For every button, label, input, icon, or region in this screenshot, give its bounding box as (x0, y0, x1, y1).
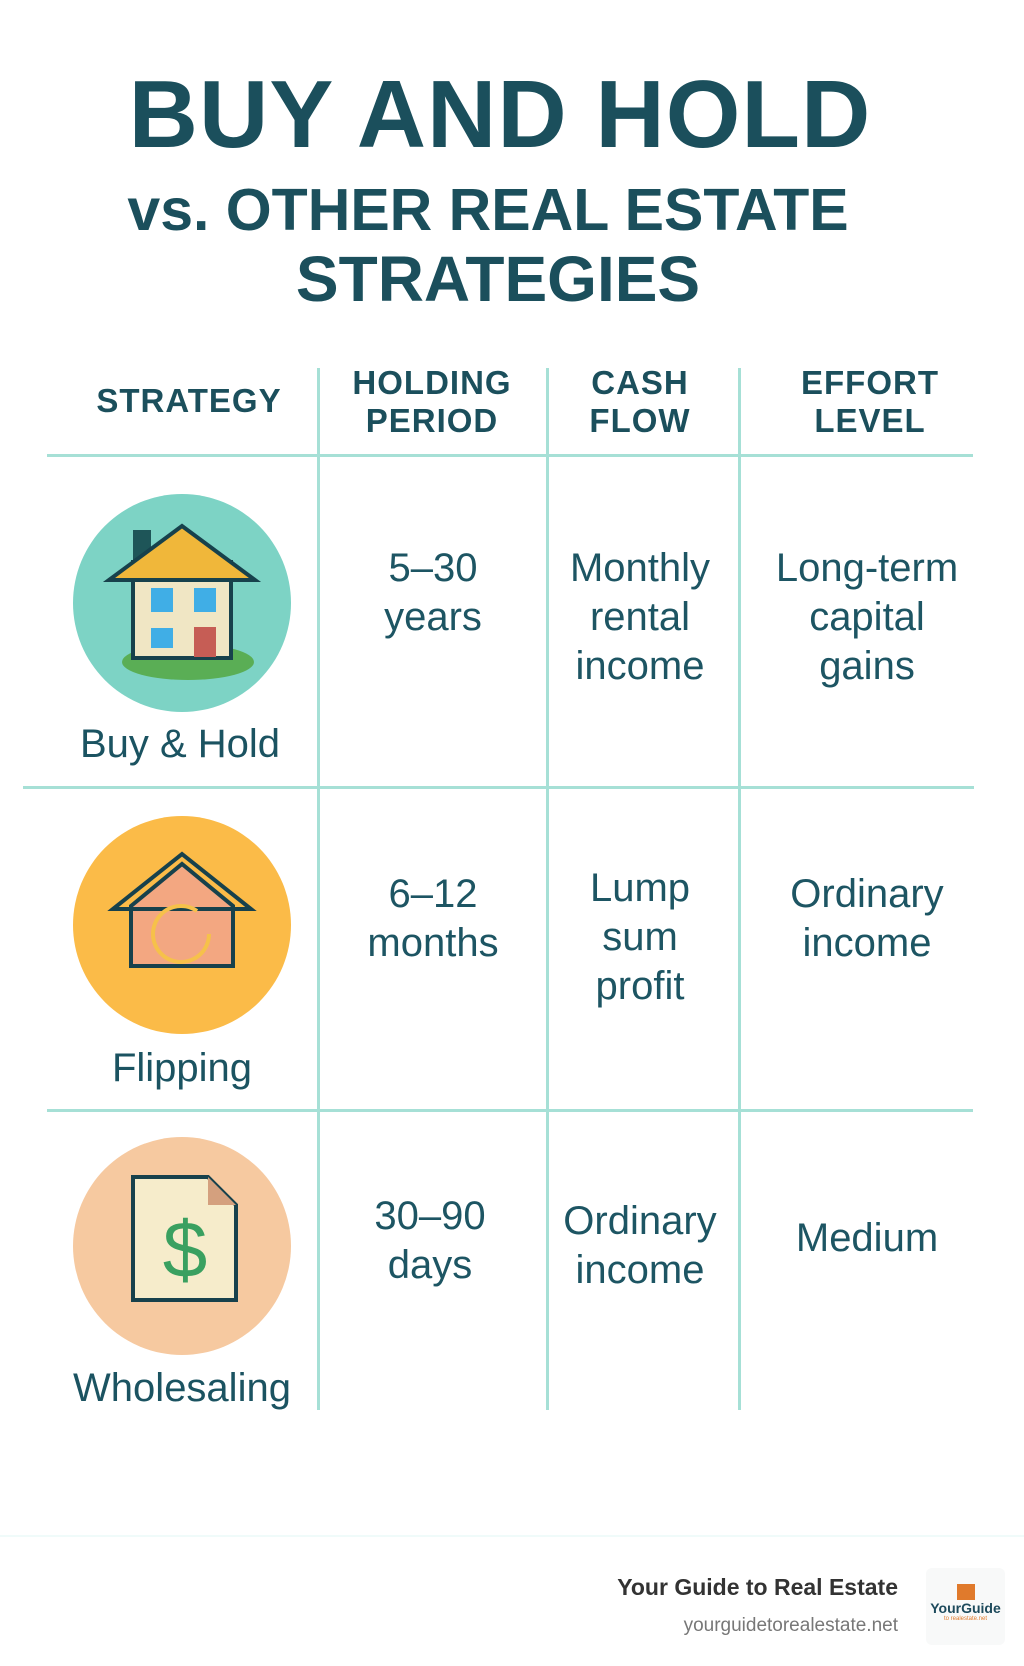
title: STRATEGIES (296, 243, 700, 315)
row: wholesaling: 30–90 (374, 1194, 486, 1238)
row: buy & hold: 5–30 (388, 546, 477, 590)
row: buy & hold: gains (819, 644, 915, 688)
title (127, 61, 871, 315)
row: flipping: Flipping (112, 1046, 252, 1090)
table header: FLOW (589, 402, 691, 439)
row: wholesaling: days (388, 1243, 472, 1287)
row: wholesaling: Medium (796, 1216, 938, 1260)
row: wholesaling: Ordinary (563, 1199, 717, 1243)
footer (617, 1574, 1001, 1636)
logo (926, 1568, 1005, 1645)
table header: CASH (591, 364, 689, 401)
logo: YourGuide (930, 1600, 1001, 1616)
row: wholesaling (73, 1137, 938, 1410)
icon: document dollar: $ (163, 1205, 207, 1294)
table header: HOLDING (352, 364, 512, 401)
row: buy & hold: income (576, 644, 704, 688)
row: flipping: Lump (590, 866, 690, 910)
row: flipping (73, 816, 944, 1090)
row: wholesaling: Wholesaling (73, 1366, 291, 1410)
title: vs. OTHER REAL ESTATE (127, 177, 849, 243)
row: flipping: Ordinary (790, 872, 944, 916)
icon: document dollar (73, 1137, 291, 1355)
table header: LEVEL (814, 402, 926, 439)
title: BUY AND HOLD (129, 61, 871, 168)
icon: house (73, 494, 291, 712)
row: buy & hold: capital (809, 595, 925, 639)
icon: flip house (73, 816, 291, 1034)
footer: yourguidetorealestate.net (684, 1615, 898, 1636)
row: flipping: 6–12 (389, 872, 477, 916)
table header: STRATEGY (96, 382, 282, 419)
row: flipping: months (367, 921, 499, 965)
row: buy & hold (73, 494, 958, 766)
row: flipping: sum (602, 915, 678, 959)
row: flipping: income (803, 921, 931, 965)
table header: EFFORT (801, 364, 939, 401)
row: buy & hold: years (384, 595, 482, 639)
row: buy & hold: rental (590, 595, 690, 639)
logo: to realestate.net (944, 1616, 987, 1622)
table header (96, 364, 939, 439)
row: buy & hold: Monthly (570, 546, 710, 590)
table header: PERIOD (366, 402, 498, 439)
row: wholesaling: income (576, 1248, 704, 1292)
footer: Your Guide to Real Estate (617, 1574, 898, 1600)
label: Buy & Hold (80, 722, 280, 766)
row: flipping: profit (596, 964, 684, 1008)
row: buy & hold: Long-term (776, 546, 958, 590)
